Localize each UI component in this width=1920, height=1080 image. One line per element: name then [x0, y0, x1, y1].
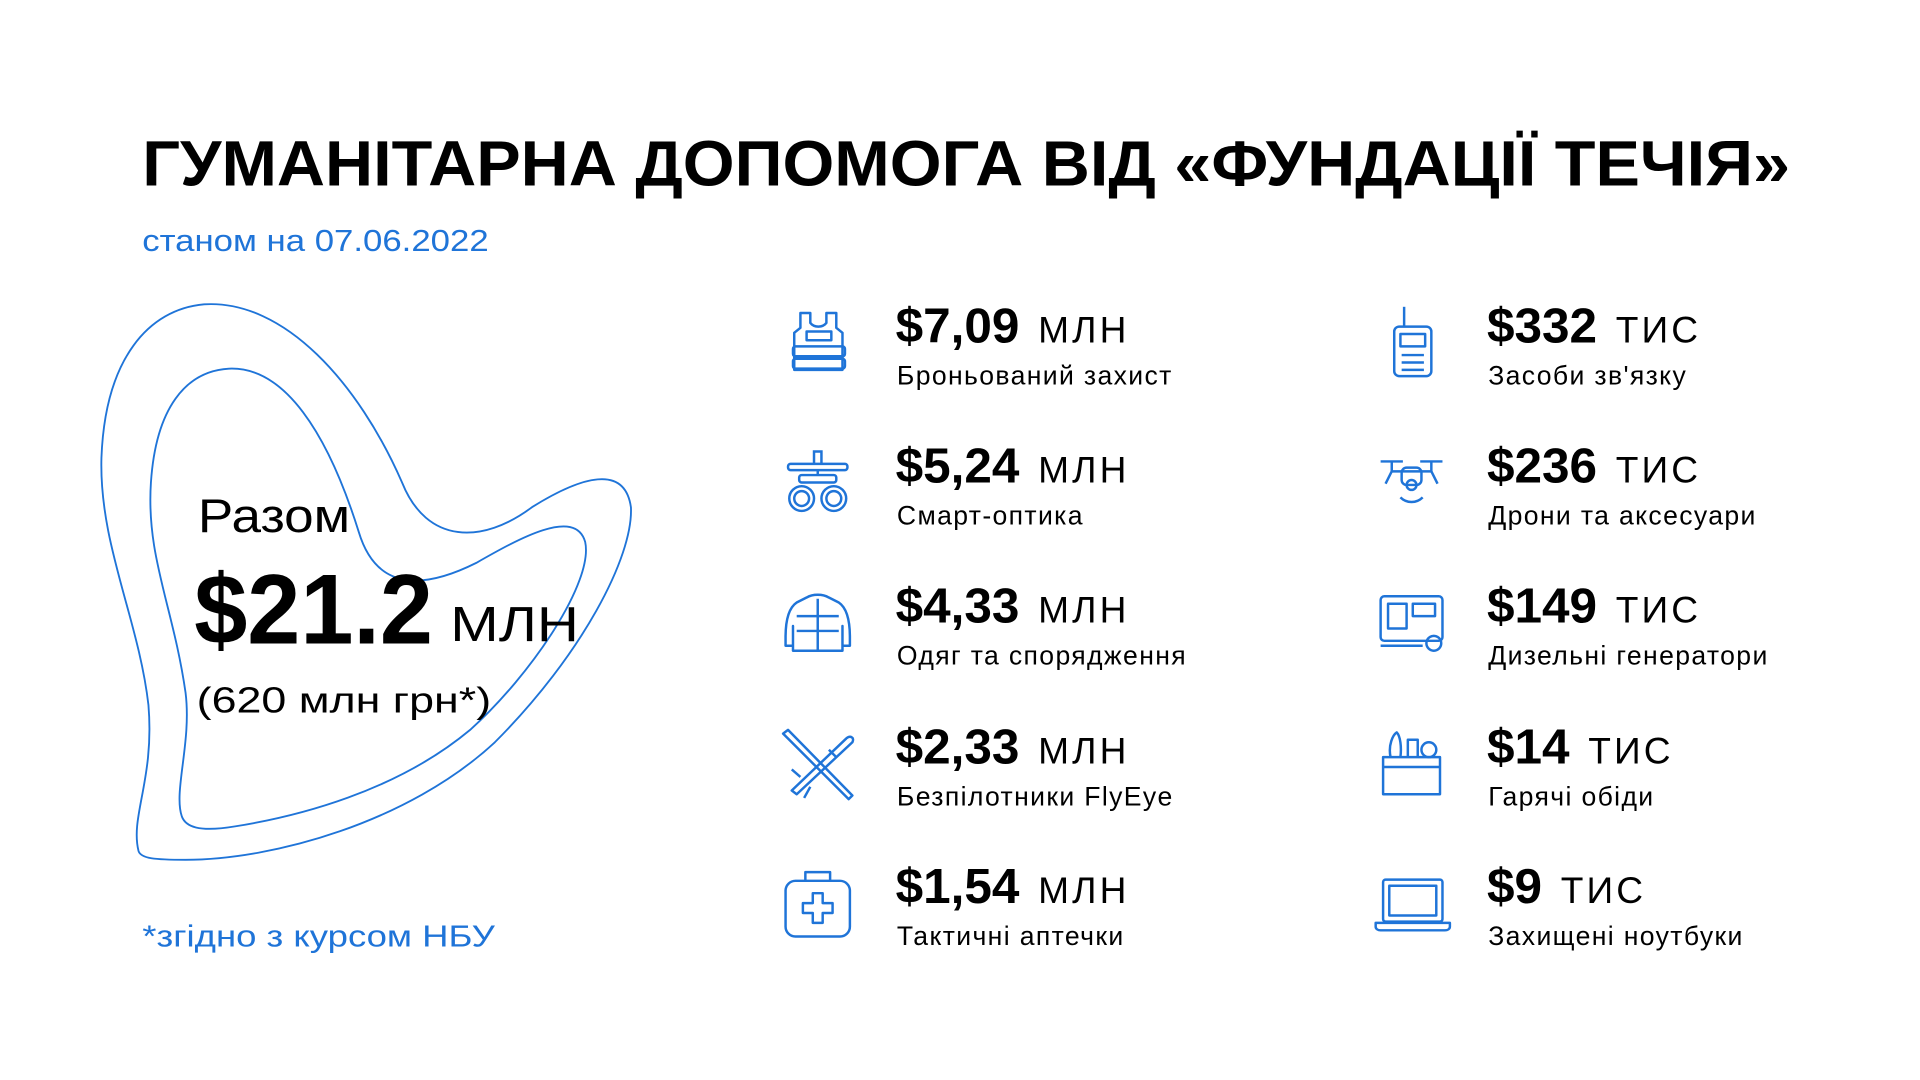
item: drones: $236 ТИС	[1487, 438, 1701, 493]
icon: quadcopter	[1381, 461, 1442, 502]
total block	[194, 489, 579, 721]
item: communications	[1394, 299, 1701, 391]
item: laptops: $9 ТИС	[1487, 859, 1646, 914]
title: ГУМАНІТАРНА ДОПОМОГА ВІД «ФУНДАЦІЇ ТЕЧІЯ»	[142, 128, 1790, 200]
item: hot meals	[1383, 719, 1674, 811]
item: clothing: Одяг та спорядження	[897, 640, 1187, 670]
icon: generator	[1381, 596, 1442, 651]
icon: jacket	[786, 595, 850, 651]
item: generators	[1381, 578, 1769, 670]
item: smart optics	[788, 438, 1130, 531]
item: hot meals: $14 ТИС	[1487, 719, 1674, 774]
item: generators: $149 ТИС	[1487, 578, 1701, 633]
total in UAH: (620 млн грн*)	[197, 681, 491, 721]
icon: medkit	[786, 872, 850, 936]
item: smart optics: $5,24 МЛН	[896, 438, 1130, 493]
item: first aid: $1,54 МЛН	[896, 859, 1130, 914]
column 2 items	[1376, 299, 1769, 951]
item: first aid	[786, 859, 1130, 951]
item: hot meals: Гарячі обіди	[1488, 781, 1655, 811]
item: FlyEye drones	[783, 719, 1174, 811]
item: clothing	[786, 578, 1187, 670]
icon: vest	[793, 313, 845, 370]
item: armor: Броньований захист	[897, 361, 1173, 391]
heart outline decoration	[101, 304, 631, 860]
total unit: МЛН	[450, 597, 579, 652]
item: smart optics: Смарт-оптика	[897, 501, 1084, 531]
icon: laptop	[1376, 880, 1450, 930]
subtitle: date: станом на 07.06.2022	[142, 223, 489, 258]
item: laptops	[1376, 859, 1744, 951]
total value: $21.2	[194, 553, 433, 664]
footnote: *згідно з курсом НБУ	[142, 918, 495, 953]
column 1 items	[783, 299, 1187, 951]
item: laptops: Захищені ноутбуки	[1488, 921, 1744, 951]
item: generators: Дизельні генератори	[1488, 640, 1769, 670]
item: FlyEye drones: $2,33 МЛН	[896, 719, 1130, 774]
item: first aid: Тактичні аптечки	[897, 921, 1125, 951]
item: armor	[793, 299, 1173, 391]
icon: drone planes	[783, 730, 853, 799]
item: drones: Дрони та аксесуари	[1488, 501, 1757, 531]
item: drones	[1381, 438, 1757, 531]
item: communications: Засоби зв'язку	[1488, 361, 1687, 391]
label: Разом: Разом	[198, 489, 350, 542]
icon: grocery bag	[1383, 732, 1440, 794]
item: clothing: $4,33 МЛН	[896, 578, 1130, 633]
icon: binoculars	[788, 452, 847, 511]
item: communications: $332 ТИС	[1487, 299, 1701, 354]
item: FlyEye drones: Безпілотники FlyEye	[897, 781, 1174, 811]
item: armor: $7,09 МЛН	[896, 299, 1130, 354]
icon: radio	[1394, 307, 1431, 376]
